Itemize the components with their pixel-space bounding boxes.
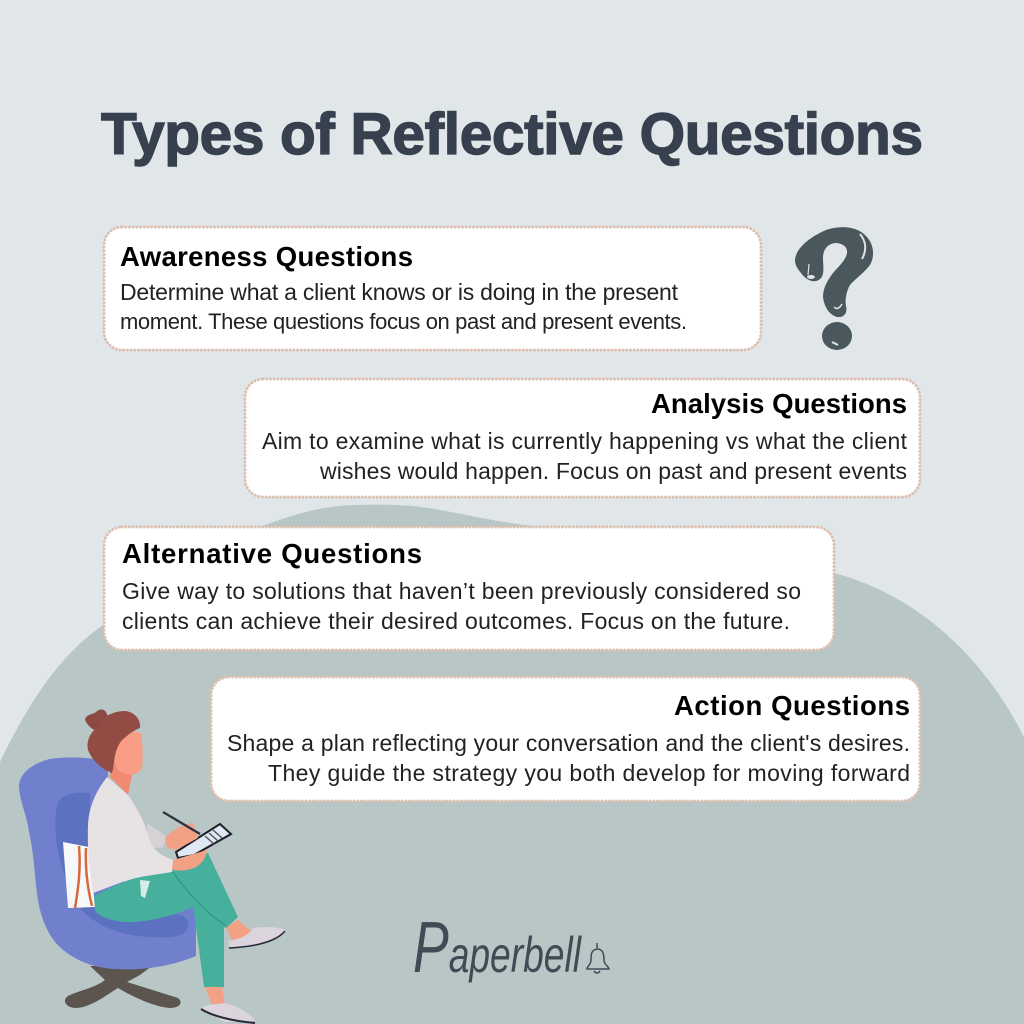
heading: awareness: Awareness Questions <box>120 241 413 272</box>
panel: awareness questions <box>104 227 761 350</box>
title: Types of Reflective Questions <box>101 102 923 167</box>
near ankle <box>205 987 225 1005</box>
trouser highlight <box>140 880 150 898</box>
panel: alternative questions <box>104 527 834 650</box>
text: action description: Shape a plan reflecting your conversation and the client's desires. <box>227 730 910 756</box>
text: analysis description <box>262 428 908 484</box>
cushion <box>63 842 95 908</box>
illustration: woman seated in armchair <box>19 710 285 1023</box>
icon: question mark <box>795 227 873 350</box>
lower hand <box>172 850 207 871</box>
far shoe <box>228 927 285 948</box>
text: analysis description: Aim to examine what is currently happening vs what the client <box>262 428 908 454</box>
upper hand <box>165 823 198 850</box>
text: awareness description: Determine what a client knows or is doing in the present <box>120 279 679 305</box>
text: alternative description: clients can achieve their desired outcomes. Focus on the future. <box>122 608 790 634</box>
background hill <box>0 505 1024 1024</box>
far ankle <box>226 920 252 943</box>
hair <box>87 711 140 773</box>
far sleeve <box>147 823 167 849</box>
panel: analysis questions <box>245 379 920 497</box>
text: analysis description: wishes would happen. Focus on past and present events <box>319 458 907 484</box>
heading: action: Action Questions <box>674 690 910 721</box>
text: alternative description: Give way to solutions that haven’t been previously considered so <box>122 578 801 604</box>
text: action description: They guide the strategy you both develop for moving forward <box>268 760 910 786</box>
text: awareness description: moment. These questions focus on past and present events. <box>120 309 687 334</box>
clipboard <box>176 824 231 858</box>
chair base <box>65 966 181 1008</box>
heading: alternative: Alternative Questions <box>122 538 422 569</box>
pencil <box>163 812 200 834</box>
logo: Paperbell: Paperbell <box>413 908 582 988</box>
face <box>113 732 143 775</box>
chair inner shadow <box>55 792 95 905</box>
icon: bell <box>587 943 609 973</box>
heading: analysis: Analysis Questions <box>651 388 907 419</box>
text: alternative description <box>122 578 801 634</box>
clipboard lines <box>205 830 222 844</box>
lower leg <box>193 905 224 987</box>
text: awareness description <box>120 279 687 334</box>
panel: action questions <box>211 677 920 801</box>
torso <box>88 777 173 893</box>
trousers <box>94 853 238 928</box>
seat shadow <box>80 905 188 937</box>
near shoe <box>201 1003 255 1022</box>
armchair <box>19 757 196 969</box>
hair bun <box>85 710 108 732</box>
text: action description <box>227 730 910 786</box>
neck <box>110 760 132 795</box>
